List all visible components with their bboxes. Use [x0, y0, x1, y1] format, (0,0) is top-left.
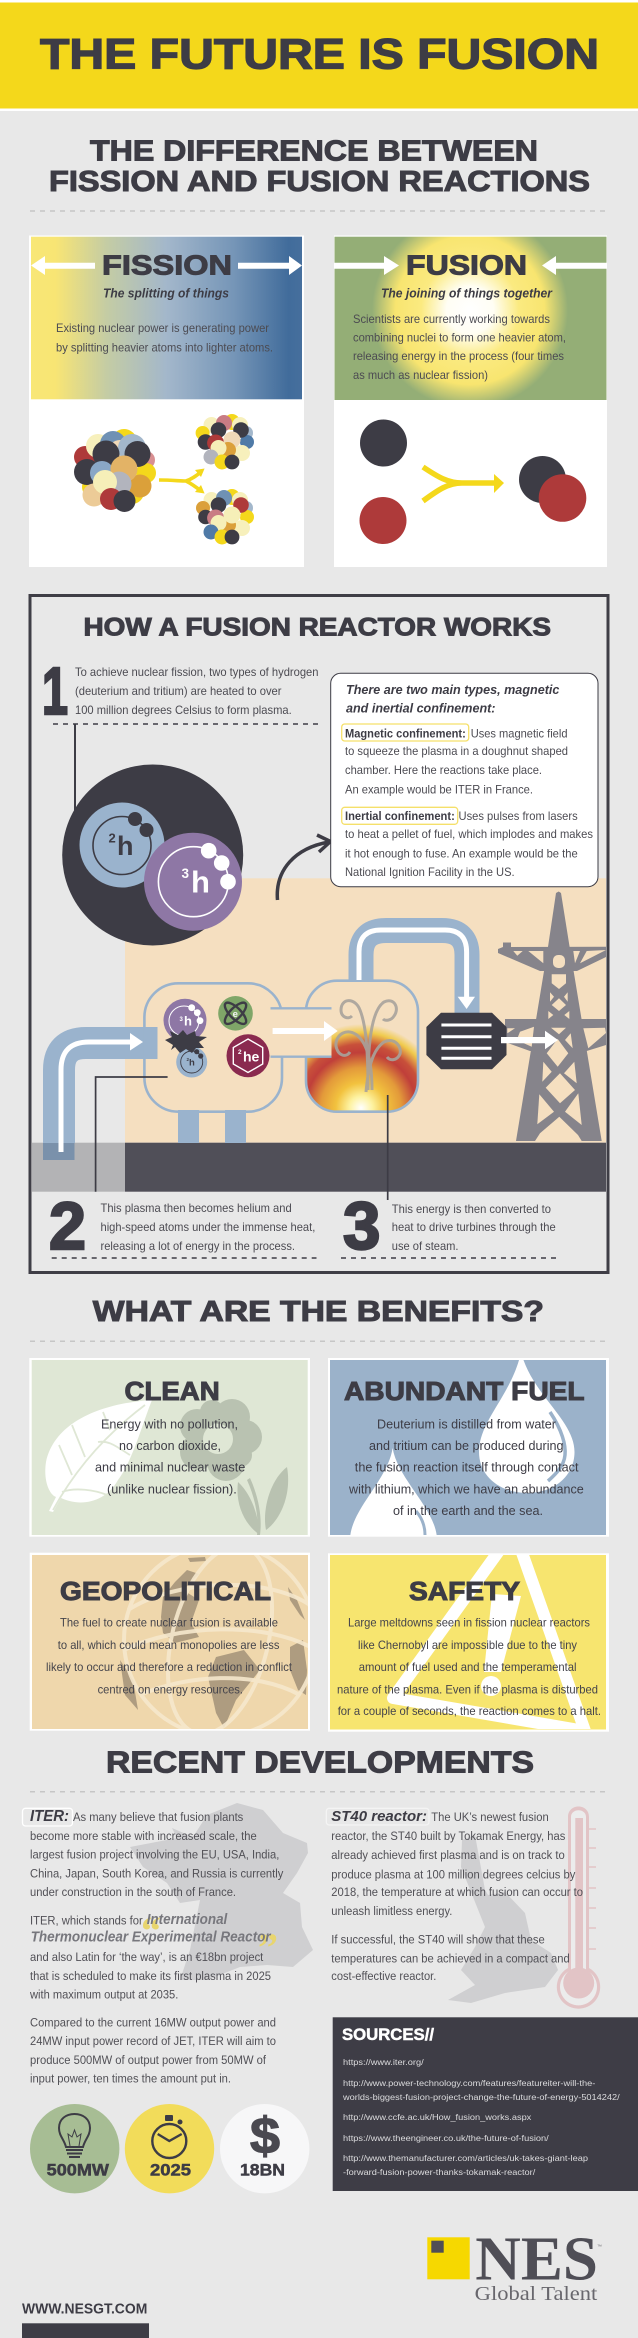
arrow: inward right [542, 256, 606, 275]
chamber legs [178, 1110, 246, 1143]
callout: confinement types: it hot enough to fuse. An example would be the [345, 847, 578, 860]
card: clean [29, 1358, 310, 1537]
frame [30, 596, 608, 1272]
steam swirls [336, 1001, 400, 1092]
tritium atom [144, 833, 242, 931]
text block: ITER: become more stable with increased scale, the [30, 1829, 257, 1843]
clean text: no carbon dioxide, [119, 1438, 221, 1453]
tritium atom: 3 [182, 866, 190, 881]
stat: 2025 [125, 2104, 214, 2193]
heading: benefits: WHAT ARE THE BENEFITS? [93, 1296, 544, 1328]
inlet pipe [43, 1033, 158, 1160]
icon: flower [180, 1399, 288, 1535]
highlight: magnetic [342, 724, 469, 741]
clean text: and minimal nuclear waste [95, 1460, 245, 1475]
pylon [498, 892, 606, 1141]
quote marks [141, 1908, 278, 1970]
stat: 18BN: 18BN [240, 2161, 285, 2180]
panel: how a fusion reactor works [30, 596, 608, 1272]
panel: sources: https://www.theengineer.co.uk/the-future-of-fusion/ [343, 2133, 549, 2143]
callout: confinement types: National Ignition Facility in the US. [345, 866, 515, 879]
callout: confinement types: to heat a pellet of fuel, which implodes and makes [345, 828, 593, 841]
panel: sources: http://www.themanufacturer.com/articles/uk-takes-giant-leap [343, 2153, 588, 2163]
text block: ITER: and also Latin for ‘the way’, is an €18bn project [30, 1950, 264, 1964]
tritium atom: h [191, 865, 210, 900]
text block: ITER: that is scheduled to make its first plasma in 2025 [30, 1969, 271, 1983]
card: abundant fuel [328, 1352, 609, 1540]
callout: confinement types: and inertial confinement: [346, 701, 496, 716]
tritium small: h [184, 1014, 192, 1029]
reactor heading: HOW A FUSION REACTOR WORKS [84, 614, 551, 642]
logo: NES Global Talent: Global Talent [475, 2283, 598, 2305]
pointer line: step 2 [96, 1077, 168, 1192]
deuterium small: 2 [186, 1057, 190, 1062]
logo: NES Global Talent: NES [475, 2225, 598, 2293]
clean heading: CLEAN [124, 1378, 220, 1406]
clean text [95, 1416, 245, 1496]
abundant fuel text: and tritium can be produced during [369, 1438, 564, 1453]
logo: NES Global Talent [427, 2225, 602, 2305]
heading: difference between fission and fusion: THE DIFFERENCE BETWEEN [90, 136, 538, 168]
text block: ST40: produce plasma at 100 million degrees celcius by [331, 1867, 576, 1881]
geopolitical text [46, 1616, 293, 1696]
fission heading: FISSION [102, 250, 232, 280]
arrow: to grid [501, 1031, 558, 1049]
text block: ITER: 24MW input power record of JET, ITER will aim to [30, 2034, 276, 2048]
callout: confinement types: Uses magnetic field [471, 727, 568, 740]
reaction chamber [144, 983, 282, 1112]
fission subtitle: The splitting of things [103, 287, 229, 301]
ST40 label: ST40 reactor: [331, 1808, 427, 1825]
geopolitical text: to all, which could mean monopolies are less [58, 1638, 280, 1652]
text block: ST40: cost-effective reactor. [331, 1969, 436, 1983]
fusion text: as much as nuclear fission) [353, 369, 488, 382]
helium: 2 [238, 1049, 242, 1056]
connector between chambers [270, 1008, 338, 1057]
callout: confinement types: chamber. Here the reactions take place. [345, 764, 542, 777]
abundant fuel text: with lithium, which we have an abundance [348, 1481, 584, 1496]
fission text: by splitting heavier atoms into lighter atoms. [56, 342, 273, 355]
text block: ITER: input power, ten times the amount put in. [30, 2072, 231, 2086]
helium: he [243, 1048, 260, 1064]
card: safety [328, 1553, 609, 1732]
highlight: inertial [342, 807, 458, 824]
step 1: To achieve nuclear fission, two types of hydrogen [75, 666, 318, 679]
icon: leaf [45, 1400, 152, 1512]
arrow: inward left [334, 256, 399, 275]
callout: confinement types: An example would be ITER in France. [345, 783, 533, 796]
heading: recent developments: RECENT DEVELOPMENTS [106, 1744, 534, 1780]
text block: ST40: 2018, the temperature at which fusion can occur to [331, 1885, 583, 1899]
panel: fusion [334, 236, 607, 567]
arrow: left [31, 256, 95, 275]
step 1: 1 [42, 654, 68, 729]
plasma fire [307, 1024, 417, 1110]
text block: ITER: China, Japan, South Korea, and Russia is currently [30, 1866, 284, 1880]
step 3: heat to drive turbines through the [392, 1221, 556, 1234]
text block: ITER: produce 500MW of output power from 50MW of [30, 2053, 267, 2067]
abundant fuel heading: ABUNDANT FUEL [344, 1378, 585, 1406]
pull quote [31, 1912, 272, 1946]
step 1: 100 million degrees Celsius to form plasma. [75, 704, 292, 717]
callout: confinement types: Uses pulses from lasers [458, 810, 578, 823]
icon: water drops [350, 1352, 574, 1540]
text block: ITER [22, 1808, 284, 2086]
panel: sources: worlds-biggest-fusion-project-change-the-future-of-energy-5014242/ [342, 2092, 620, 2102]
step 2: 2 [49, 1189, 86, 1264]
abundant fuel text: the fusion reaction itself through contact [355, 1460, 579, 1475]
heading: difference between fission and fusion [49, 136, 590, 198]
abundant fuel text: of in the earth and the sea. [393, 1503, 543, 1518]
geopolitical heading: GEOPOLITICAL [60, 1578, 271, 1606]
text block: ST40: reactor, the ST40 built by Tokamak Energy, has [331, 1829, 565, 1843]
icon: thermometer [557, 1806, 600, 2009]
illustration: lower small cluster [196, 489, 254, 544]
merged nuclei [519, 456, 586, 522]
step 2: high-speed atoms under the immense heat, [100, 1221, 315, 1234]
clean text: (unlike nuclear fission). [107, 1481, 237, 1496]
header banner [0, 0, 638, 111]
icon: globe [120, 1555, 308, 1729]
fusion heading: FUSION [406, 250, 527, 280]
step 3: 3 [343, 1189, 380, 1264]
icon: stopwatch [152, 2115, 186, 2158]
website footer [22, 2301, 149, 2338]
safety text: amount of fuel used and the temperamental [359, 1660, 576, 1674]
peach background [125, 878, 606, 1143]
ground [32, 1143, 606, 1192]
deuterium atom [80, 802, 164, 888]
arrow: merging [423, 467, 504, 501]
deuterium small: h [189, 1058, 195, 1068]
electron: e [233, 1009, 238, 1020]
icon: dollar: $ [250, 2107, 280, 2164]
text block: ITER: ITER, which stands for [30, 1913, 143, 1927]
callout: confinement types: to squeeze the plasma in a doughnut shaped [345, 745, 568, 758]
nucleus: dark [360, 420, 407, 466]
panel: sources: -forward-fusion-power-thanks-tokamak-reactor/ [343, 2167, 536, 2177]
card: geopolitical [30, 1552, 310, 1731]
helium [226, 1034, 270, 1077]
arrow: splitting [159, 468, 205, 494]
safety text: nature of the plasma. Even if the plasma is disturbed [337, 1682, 598, 1696]
pull quote: Thermonuclear Experimental Reactor [31, 1930, 272, 1946]
abundant fuel text [348, 1416, 584, 1518]
illustration: large atom cluster [74, 429, 156, 512]
fusion subtitle: The joining of things together [381, 287, 553, 301]
quote marks: ” [258, 1925, 278, 1970]
tritium small: 3 [180, 1017, 184, 1023]
safety text: like Chernobyl are impossible due to the tiny [358, 1638, 577, 1652]
step 2 [49, 1189, 315, 1264]
website footer: WWW.NESGT.COM [22, 2301, 147, 2317]
ITER label: ITER: [30, 1808, 69, 1825]
step 2: releasing a lot of energy in the process. [100, 1240, 295, 1253]
text block: ST40: The UK’s newest fusion [431, 1810, 549, 1824]
fusion text: Scientists are currently working towards [353, 313, 550, 326]
text block: ST40: unleash limitless energy. [331, 1904, 452, 1918]
text block: ST40 [326, 1808, 583, 1983]
arrow: to callout [277, 835, 330, 900]
map: France [130, 1803, 313, 1980]
magnified atoms [62, 764, 243, 946]
heat chamber [306, 981, 418, 1112]
safety text: Large meltdowns seen in fission nuclear reactors [348, 1616, 590, 1630]
nucleus: red [360, 497, 406, 544]
step 3: use of steam. [392, 1240, 458, 1253]
abundant fuel text: Deuterium is distilled from water [377, 1416, 557, 1431]
text block: ITER: Compared to the current 16MW output power and [30, 2016, 276, 2030]
arrow: right [238, 256, 302, 275]
fusion text: combining nuclei to form one heavier atom, [353, 332, 566, 344]
steam pipe [359, 930, 475, 1013]
pointer line: step 3 [387, 1095, 389, 1200]
deuterium atom: h [117, 831, 134, 861]
fission text: Existing nuclear power is generating power [56, 322, 269, 335]
callout: confinement types: Magnetic confinement: [345, 727, 466, 740]
step 2: This plasma then becomes helium and [100, 1202, 292, 1215]
text block: ITER: largest fusion project involving the EU, USA, India, [30, 1847, 279, 1861]
pull quote: International [147, 1912, 228, 1928]
safety text [337, 1616, 601, 1718]
clean text: Energy with no pollution, [101, 1416, 238, 1431]
step 3 [343, 1189, 556, 1264]
tritium small [164, 999, 206, 1042]
safety text: for a couple of seconds, the reaction comes to a halt. [338, 1704, 601, 1718]
panel: sources: SOURCES// [342, 2026, 434, 2044]
fission text [56, 322, 273, 355]
geopolitical text: The fuel to create nuclear fusion is available [60, 1616, 278, 1630]
collision burst [165, 1030, 207, 1053]
geopolitical text: centred on energy resources. [98, 1682, 243, 1696]
panel: sources [333, 2017, 638, 2191]
fusion text: releasing energy in the process (four times [353, 350, 564, 363]
icon: warning triangle [393, 1530, 585, 1731]
panel: sources: https://www.iter.org/ [343, 2057, 424, 2067]
panel: sources: http://www.power-technology.com/features/featureiter-will-the- [343, 2078, 595, 2088]
icon: light bulb [59, 2114, 90, 2157]
text block: ITER: under construction in the south of France. [30, 1885, 236, 1899]
text block: ST40: already achieved first plasma and is on track to [331, 1848, 565, 1862]
electron [218, 996, 253, 1031]
deuterium small [176, 1046, 207, 1078]
step 1: (deuterium and tritium) are heated to over [75, 685, 282, 698]
quote marks: “ [141, 1908, 161, 1953]
panel: fission [29, 236, 304, 567]
callout: confinement types: Inertial confinement: [345, 810, 455, 823]
title: THE FUTURE IS FUSION [40, 30, 599, 78]
safety heading: SAFETY [409, 1578, 520, 1606]
text block: ITER: with maximum output at 2035. [29, 1988, 178, 2002]
panel: sources: http://www.ccfe.ac.uk/How_fusion_works.aspx [343, 2112, 532, 2122]
logo: NES Global Talent: ™ [597, 2244, 602, 2250]
fusion text [353, 313, 566, 382]
stat: 2025: 2025 [150, 2161, 191, 2180]
map: UK [448, 1835, 558, 2003]
illustration: upper small cluster [196, 414, 254, 470]
stat: 500MW [30, 2104, 119, 2193]
callout: confinement types [331, 673, 598, 887]
stat: 500MW: 500MW [47, 2161, 110, 2180]
stat: 18BN [220, 2104, 309, 2193]
pointer line: step 1 [74, 724, 76, 812]
text block: ST40: If successful, the ST40 will show that these [331, 1932, 545, 1946]
text block: ST40: temperatures can be achieved in a compact and [331, 1951, 570, 1965]
step 1 [42, 654, 318, 729]
step 3: This energy is then converted to [392, 1203, 551, 1216]
geopolitical text: likely to occur and therefore a reduction in conflict [46, 1660, 293, 1674]
callout: confinement types: There are two main types, magnetic [346, 682, 560, 697]
turbine [426, 1013, 506, 1069]
heading: difference between fission and fusion: FISSION AND FUSION REACTIONS [49, 166, 590, 198]
text block: ITER: As many believe that fusion plants [73, 1810, 243, 1824]
deuterium atom: 2 [108, 830, 116, 846]
